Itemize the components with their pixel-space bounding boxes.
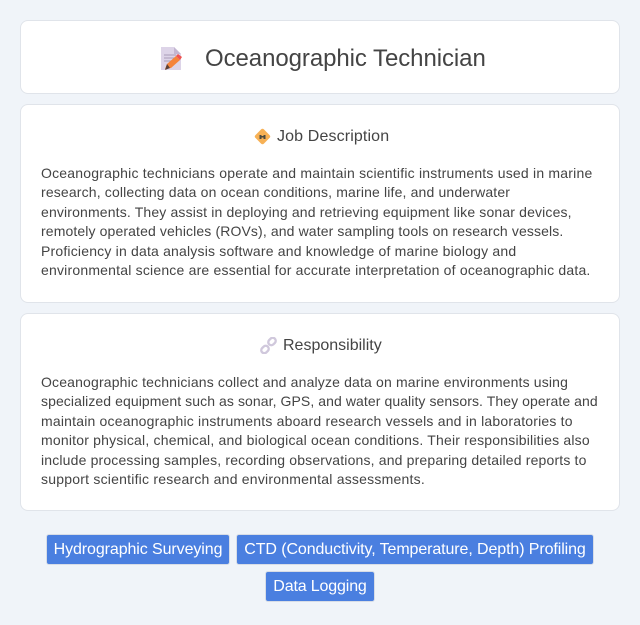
text block: responsibility: maintain oceanographic instruments aboard research vessels and in laboratories to [41, 413, 573, 429]
text block: job description: Proficiency in data analysis software and knowledge of marine biology and [41, 243, 516, 259]
text block: job description: environments. They assist in deploying and retrieving equipment like sonar devices, [41, 204, 572, 220]
tag: CTD profiling: CTD (Conductivity, Temperature, Depth) Profiling [244, 541, 586, 558]
text block: responsibility [41, 374, 598, 487]
icon: chain link [260, 337, 277, 354]
text block: job description: remotely operated vehicles (ROVs), and water sampling tools on research vessels. [41, 223, 563, 239]
heading: responsibility: Responsibility [283, 337, 382, 354]
heading: job description: Job Description [277, 128, 389, 145]
tag: data logging: Data Logging [273, 578, 367, 595]
tag: data logging [265, 571, 375, 602]
tag: hydrographic surveying: Hydrographic Surveying [54, 541, 222, 558]
tag: hydrographic surveying [46, 534, 230, 565]
text block: job description: Oceanographic technicians operate and maintain scientific instruments used in marine [41, 165, 592, 181]
panel: title [20, 20, 620, 94]
text block: responsibility: support scientific research and environmental assessments. [41, 471, 425, 487]
text block: job description [41, 165, 592, 278]
panel: responsibility [20, 313, 620, 511]
icon: diamond sign [254, 128, 270, 144]
text block: responsibility: specialized equipment such as sonar, GPS, and water quality sensors. They operate and [41, 393, 598, 409]
text block: responsibility: Oceanographic technicians collect and analyze data on marine environments using [41, 374, 568, 390]
title: Oceanographic Technician [205, 45, 486, 72]
icon: document with pencil [161, 47, 182, 70]
text block: responsibility: include processing samples, recording observations, and preparing detailed reports to [41, 452, 587, 468]
tag: CTD profiling [236, 534, 594, 565]
text block: job description: environmental science are essential for accurate interpretation of oceanographic data. [41, 262, 591, 278]
text block: job description: research, collecting data on ocean conditions, marine life, and underwater [41, 184, 510, 200]
text block: responsibility: monitor physical, chemical, and biological ocean conditions. Their responsibilities also [41, 432, 590, 448]
panel: job description [20, 104, 620, 303]
